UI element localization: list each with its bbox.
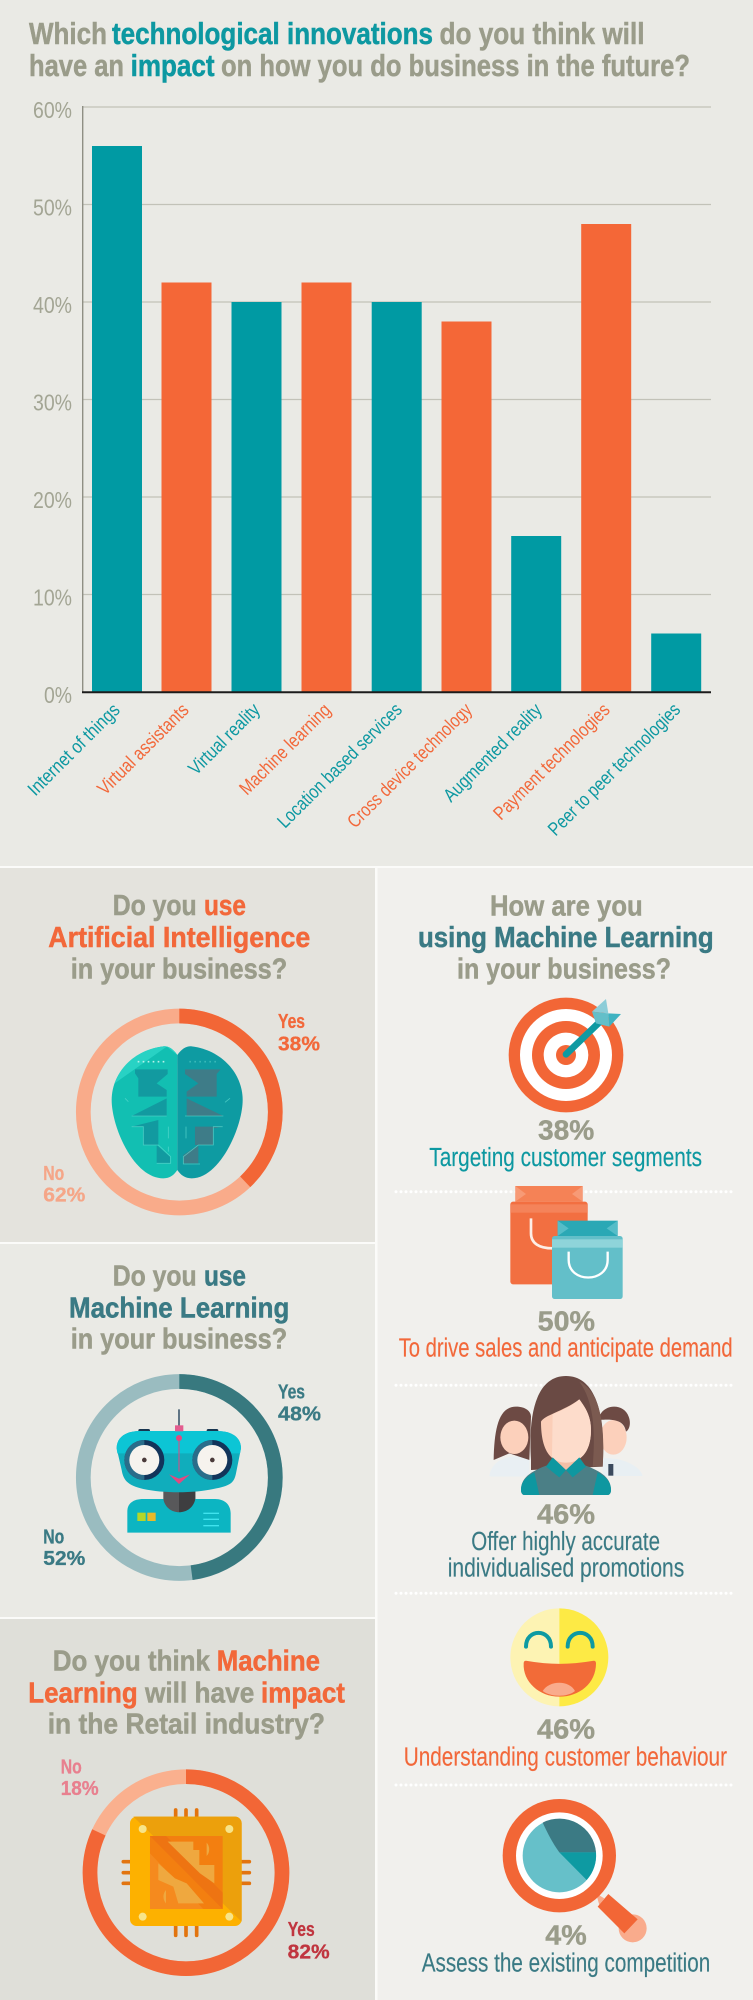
icon: robot — [117, 1409, 241, 1533]
label: yes 38%: 38% — [278, 1033, 320, 1056]
label: no 18%: No — [61, 1755, 82, 1778]
label: yes 82% — [288, 1918, 330, 1963]
icon: shopping bags — [510, 1186, 623, 1299]
label: no 62%: 62% — [43, 1184, 85, 1207]
heading: impact — [261, 1677, 345, 1709]
x axis labels — [24, 699, 685, 840]
heading: in your business? — [71, 954, 287, 986]
heading: Learning — [28, 1677, 138, 1709]
y axis labels: 10% — [33, 584, 72, 610]
y axis labels: 30% — [33, 390, 72, 416]
heading: Do you — [113, 890, 197, 922]
x axis labels: Machine learning — [236, 700, 335, 800]
heading: Machine — [217, 1646, 320, 1678]
y axis labels: 20% — [33, 487, 72, 513]
heading — [48, 890, 310, 986]
panel: how are you using Machine Learning — [378, 868, 753, 2000]
item: individualised promotions: 46% — [537, 1498, 595, 1529]
heading — [69, 1260, 289, 1356]
heading: using Machine Learning — [418, 922, 714, 954]
label: yes 82%: 82% — [288, 1940, 330, 1963]
title: do you think will — [440, 16, 644, 51]
title: have an — [29, 48, 124, 83]
item: assess competition — [422, 1799, 710, 1978]
heading: Do you — [113, 1260, 197, 1292]
title: impact — [131, 48, 215, 83]
x axis labels: Internet of things — [24, 700, 124, 800]
item: drive sales — [399, 1186, 733, 1363]
label: yes 48%: 48% — [278, 1403, 321, 1426]
icon: brain — [112, 1046, 243, 1178]
y axis labels: 0% — [44, 682, 72, 708]
title — [29, 16, 690, 83]
y axis labels — [33, 97, 72, 708]
item: individualised promotions: Offer highly accurate — [471, 1528, 660, 1556]
label: no 52%: 52% — [43, 1547, 85, 1570]
item: understanding customer behaviour: 46% — [537, 1713, 595, 1744]
heading: Machine Learning — [69, 1292, 289, 1324]
label: yes 48%: Yes — [278, 1380, 305, 1403]
heading: Artificial Intelligence — [48, 922, 310, 954]
heading: Do you think — [53, 1646, 210, 1678]
label: no 18%: 18% — [61, 1777, 99, 1800]
heading: use — [204, 1260, 246, 1292]
item: assess competition: 4% — [545, 1919, 587, 1950]
label: yes 48% — [278, 1380, 321, 1426]
x axis labels: Virtual assistants — [94, 700, 193, 800]
x axis labels: Cross device technology — [344, 699, 477, 833]
label: no 62% — [43, 1162, 85, 1207]
label: yes 38%: Yes — [278, 1010, 305, 1033]
icon: smiley face — [510, 1608, 608, 1706]
item: targeting customer segments — [429, 998, 702, 1172]
donut chart: 38% yes — [83, 1016, 275, 1208]
icon: microchip — [123, 1810, 249, 1935]
label: no 52% — [43, 1525, 85, 1570]
label: no 18% — [61, 1755, 99, 1800]
icon: group of people — [489, 1376, 643, 1495]
bar chart: technological innovations — [24, 97, 711, 840]
item: individualised promotions: individualised promotions — [448, 1555, 684, 1583]
heading: in the Retail industry? — [48, 1708, 325, 1740]
x axis labels: Peer to peer technologies — [544, 700, 685, 840]
item: targeting customer segments: 38% — [538, 1114, 594, 1145]
heading: use — [204, 890, 246, 922]
label: no 62%: No — [43, 1162, 64, 1185]
panel: use Machine Learning — [0, 1244, 375, 1617]
panel: use Artificial Intelligence — [0, 868, 375, 1242]
item: understanding customer behaviour — [404, 1608, 727, 1772]
item: individualised promotions — [448, 1376, 684, 1583]
panel: impact in Retail industry — [0, 1619, 375, 2000]
donut chart: 82% yes — [90, 1777, 282, 1969]
y axis labels: 60% — [33, 97, 72, 123]
label: yes 82%: Yes — [288, 1918, 315, 1941]
y axis labels: 50% — [33, 194, 72, 220]
label: no 52%: No — [43, 1525, 64, 1548]
icon: magnifying glass with pie chart — [503, 1799, 647, 1942]
x axis labels: Virtual reality — [185, 699, 265, 780]
label: yes 38% — [278, 1010, 320, 1056]
heading: will have — [144, 1677, 254, 1709]
heading: in your business? — [457, 954, 671, 986]
bars — [92, 146, 701, 692]
title: Which — [29, 16, 107, 51]
item: drive sales: 50% — [538, 1306, 595, 1337]
donut chart: 48% yes — [83, 1382, 275, 1574]
heading — [418, 890, 714, 986]
icon: target with arrow — [509, 998, 623, 1112]
y axis labels: 40% — [33, 292, 72, 318]
heading — [28, 1646, 345, 1740]
heading: in your business? — [71, 1324, 287, 1356]
title: technological innovations — [112, 16, 433, 51]
heading: How are you — [490, 890, 643, 922]
x axis labels: Payment technologies — [490, 700, 614, 825]
x axis labels: Location based services — [274, 700, 407, 833]
x axis labels: Augmented reality — [440, 699, 547, 807]
